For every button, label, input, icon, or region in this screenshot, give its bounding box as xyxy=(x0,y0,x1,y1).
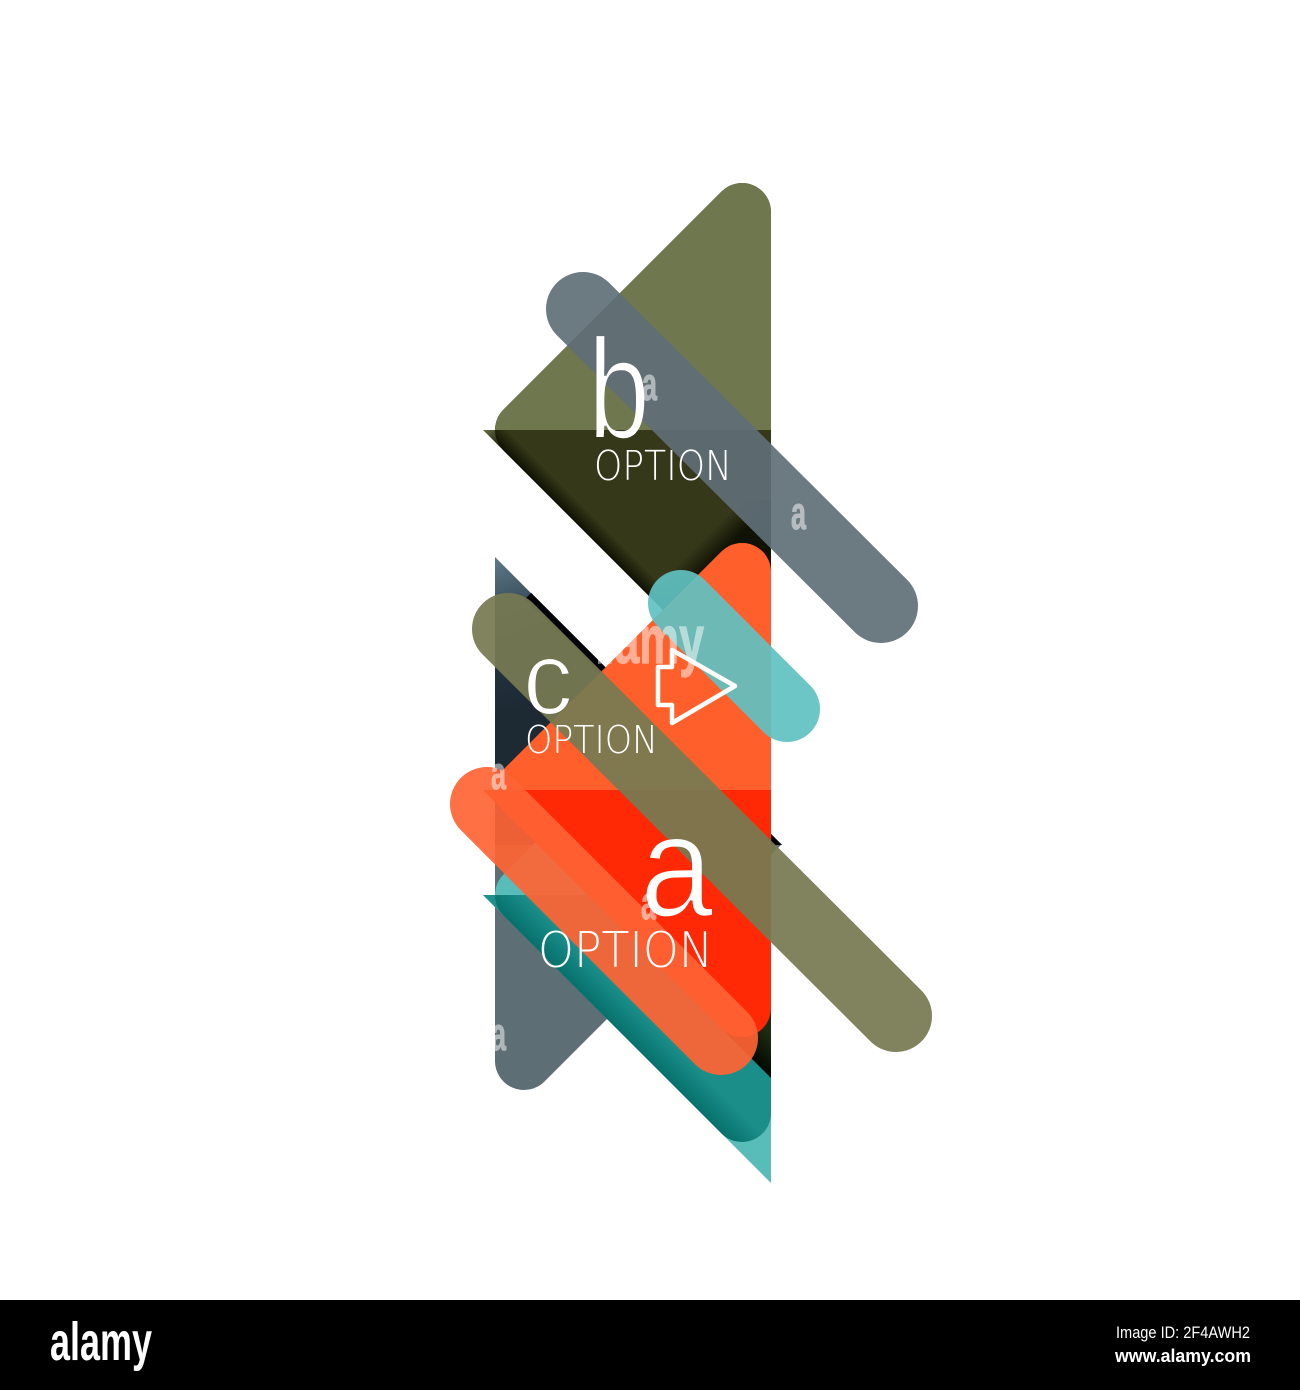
watermark a on orange pill: a xyxy=(491,747,506,799)
letter a: a xyxy=(640,785,713,947)
grey lower part xyxy=(495,845,781,1090)
orange upper rounded triangle xyxy=(502,543,771,790)
red tip xyxy=(483,790,520,827)
icon: outlined arrow xyxy=(658,650,735,723)
black right tip xyxy=(760,831,782,845)
pill: orange xyxy=(487,804,721,1038)
arrow: grey and navy lower arrow xyxy=(495,557,782,1090)
teal tip xyxy=(483,895,530,942)
olive soft shade xyxy=(680,514,771,574)
label: option a: OPTION xyxy=(538,922,713,979)
teal rounded triangle lower xyxy=(495,648,771,1142)
letter c: c xyxy=(523,621,573,737)
footer image id: Image ID: 2F4AWH2 xyxy=(1116,1323,1250,1342)
arrow: orange and red centre xyxy=(483,543,771,1078)
olive shadow wedge xyxy=(483,430,771,718)
pill: teal xyxy=(681,603,787,709)
olive lower rounded triangle xyxy=(495,183,771,677)
teal shadow wedge xyxy=(483,895,771,1183)
arrow: olive top xyxy=(483,183,771,610)
dark shadow wedge xyxy=(483,790,771,1078)
navy upper part xyxy=(495,557,782,845)
footer bar xyxy=(0,1300,1300,1390)
label: option b: OPTION xyxy=(594,442,732,490)
watermark a on olive: a xyxy=(642,358,657,410)
teal rounded triangle upper xyxy=(495,874,526,895)
pill: grey xyxy=(583,309,881,606)
black edge stripe xyxy=(528,596,604,672)
watermark a on red: a xyxy=(641,877,656,929)
arrow: teal xyxy=(483,843,771,1183)
olive upper rounded triangle xyxy=(495,183,771,430)
footer logo: alamy xyxy=(50,1312,152,1372)
watermark a on grey pill: a xyxy=(791,487,806,539)
label: option c: OPTION xyxy=(525,718,658,762)
pill: olive xyxy=(508,629,896,1016)
footer url: www.alamy.com xyxy=(1114,1346,1251,1366)
red lower rounded triangle xyxy=(495,543,771,1037)
watermark a on grey arrow: a xyxy=(491,1008,506,1060)
letter b: b xyxy=(588,310,650,469)
watermark word: alamy xyxy=(577,602,704,678)
watermark letters xyxy=(491,358,806,1060)
